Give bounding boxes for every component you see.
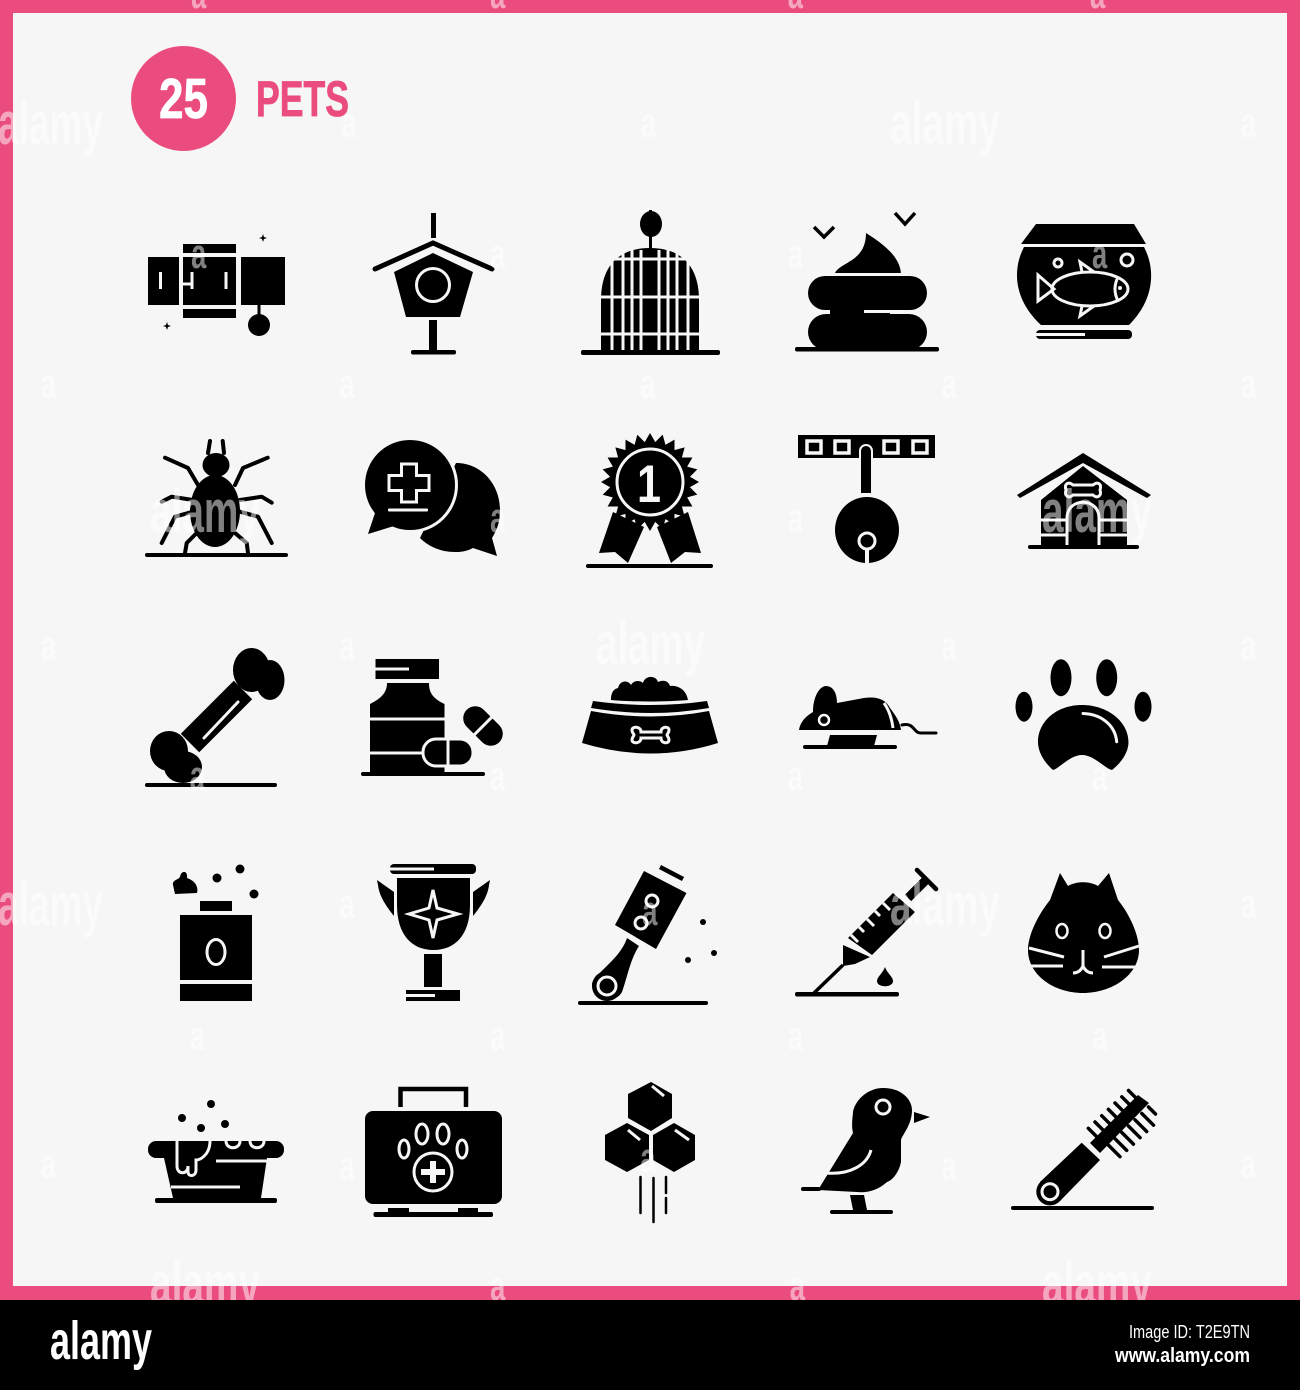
icon: rosette award (586, 417, 715, 568)
icon: rosette award: 1 (637, 455, 661, 514)
icon: first aid case (365, 1089, 502, 1217)
icon: honeycomb balloons (605, 1082, 695, 1222)
watermarks: aa (490, 1262, 805, 1309)
icon: beetle (145, 441, 288, 557)
icon: trophy (377, 864, 490, 1001)
watermarks: aaaa (190, 1012, 1107, 1059)
watermarks: alamy (150, 478, 260, 545)
footer bar: Image ID: T2E9TN (1129, 1322, 1250, 1342)
icon: lint roller (578, 867, 717, 1005)
footer bar (0, 1300, 1300, 1390)
icon: bell collar (798, 435, 935, 564)
watermarks: aaa (341, 99, 1256, 146)
icon: bath tub with bubbles (148, 1100, 284, 1203)
icon: poop (795, 213, 939, 352)
watermarks: alamy (890, 871, 1000, 938)
watermarks: alamy (0, 871, 103, 938)
footer bar: www.alamy.com (1114, 1345, 1250, 1367)
watermarks: aa (339, 880, 1256, 927)
watermarks: alamy (1042, 478, 1152, 545)
icon: flea spray bottle (173, 864, 258, 1001)
icon: bone (145, 648, 284, 787)
icon: collar (148, 234, 285, 336)
watermarks: aa (490, 494, 803, 541)
watermarks: alamy (150, 1250, 260, 1317)
icon: food bowl (582, 677, 718, 754)
icon: bird (801, 1088, 930, 1214)
watermarks: aa (41, 1140, 1256, 1187)
icon: mouse (799, 686, 936, 749)
watermarks: aaaa (191, 230, 1107, 277)
watermarks: a (640, 1134, 656, 1181)
icon: dog house (1017, 453, 1151, 549)
watermarks: a (642, 887, 658, 934)
watermarks: aaaa (41, 622, 1256, 669)
watermarks: alamy (890, 90, 1000, 157)
icon: paw print (1016, 659, 1152, 770)
icon: birdhouse (375, 213, 492, 354)
icon: grooming brush (1011, 1090, 1156, 1210)
watermarks: alamy (1042, 1250, 1152, 1317)
footer bar: alamy (50, 1311, 152, 1371)
icon: fish bowl (1017, 224, 1151, 339)
watermarks: alamy (596, 610, 705, 677)
icon: chat bubbles (364, 438, 500, 556)
title badge: 25 (159, 67, 208, 131)
watermarks: alamy (0, 90, 103, 157)
watermarks: aaaa (190, 752, 1107, 799)
watermarks: aa (339, 1142, 957, 1189)
title badge (131, 46, 236, 151)
icon: medicine bottle and pills (361, 659, 509, 776)
watermarks: aaaaa (41, 360, 1256, 407)
icon: syringe (795, 870, 936, 996)
title: PETS (256, 71, 349, 127)
icon: bird cage (581, 210, 720, 355)
icon: cat face (1028, 873, 1139, 993)
